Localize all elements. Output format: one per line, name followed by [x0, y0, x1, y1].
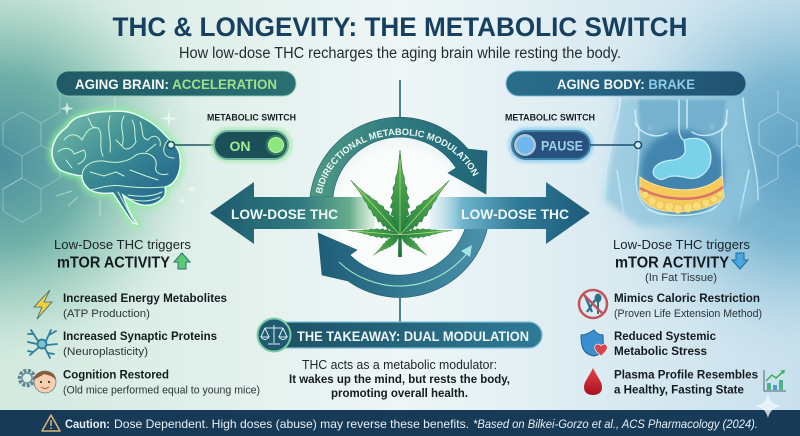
- icon: glowing brain: [52, 97, 200, 224]
- icon: warning triangle: [42, 415, 60, 431]
- arrow: top arc: [310, 117, 487, 197]
- takeaway text: THC acts as a metabolic modulator:: [302, 358, 497, 372]
- item: plasma: a Healthy, Fasting State: [614, 384, 744, 396]
- icon: corner sparkle: [755, 393, 781, 418]
- icon: gear and face: [20, 370, 56, 393]
- takeaway text: [289, 358, 510, 400]
- item: stress: Metabolic Stress: [614, 346, 707, 358]
- icon: shield with heart: [581, 330, 607, 356]
- switch: on: METABOLIC SWITCH: [207, 112, 296, 124]
- right benefits list: [579, 290, 786, 396]
- left mTOR statement: [54, 238, 191, 272]
- icon: balance scale: [258, 318, 290, 352]
- arc label: BIDIRECTIONAL METABOLIC MODULATION: [316, 128, 479, 194]
- right mTOR statement: [613, 238, 750, 284]
- takeaway heading: [258, 318, 542, 352]
- item: caloric: (Proven Life Extension Method): [614, 308, 762, 320]
- center vertical line: [399, 80, 401, 322]
- left mTOR statement: mTOR ACTIVITY: [57, 254, 170, 272]
- left benefits list: [20, 290, 260, 396]
- item: stress: Reduced Systemic: [614, 331, 717, 343]
- footer caution bar: [0, 410, 800, 436]
- title: THC & LONGEVITY: THE METABOLIC SWITCH: [112, 12, 688, 42]
- left mTOR statement: Low-Dose THC triggers: [54, 238, 191, 252]
- takeaway text: promoting overall health.: [331, 386, 468, 400]
- icon: rising chart: [764, 370, 786, 391]
- icon: lightning bolt: [34, 290, 52, 319]
- arrow: low-dose THC left: LOW-DOSE THC: [231, 206, 338, 222]
- panel: aging body heading: [506, 71, 746, 96]
- item: cognition: (Old mice performed equal to young mice): [63, 384, 260, 396]
- item: energy: (ATP Production): [63, 308, 150, 320]
- panel: aging body heading: AGING BODY: BRAKE: [557, 76, 695, 92]
- arrow: low-dose THC right: LOW-DOSE THC: [461, 206, 569, 222]
- panel: aging brain heading: [56, 71, 296, 96]
- subtitle: How low-dose THC recharges the aging brain while resting the body.: [179, 45, 621, 62]
- takeaway text: It wakes up the mind, but rests the body,: [289, 372, 510, 386]
- takeaway heading: THE TAKEAWAY: DUAL MODULATION: [297, 328, 529, 344]
- caution text: Caution:: [65, 417, 110, 431]
- icon: cannabis leaf: [345, 150, 455, 259]
- switch: on: ON: [230, 138, 250, 154]
- panel: aging brain heading: AGING BRAIN: ACCELERATION: [75, 76, 277, 92]
- icon: neuron: [28, 330, 57, 358]
- item: energy: Increased Energy Metabolites: [63, 293, 227, 305]
- item: synaptic: (Neuroplasticity): [63, 346, 148, 358]
- item: plasma: Plasma Profile Resembles: [614, 370, 758, 382]
- right mTOR statement: Low-Dose THC triggers: [613, 238, 750, 252]
- switch: pause: PAUSE: [541, 138, 583, 154]
- icon: blood drop: [584, 368, 602, 395]
- arrow: low-dose THC right: [430, 182, 590, 244]
- right mTOR statement: (In Fat Tissue): [645, 272, 717, 284]
- item: caloric: Mimics Caloric Restriction: [614, 293, 760, 305]
- icon: no eating: [579, 290, 607, 318]
- item: cognition: Cognition Restored: [63, 370, 169, 382]
- item: synaptic: Increased Synaptic Proteins: [63, 331, 217, 343]
- right mTOR statement: mTOR ACTIVITY: [615, 254, 729, 272]
- arrow: low-dose THC left: [210, 182, 375, 244]
- caution text: Dose Dependent. High doses (abuse) may reverse these benefits.: [114, 417, 469, 431]
- icon: torso with stomach and fat: [604, 97, 758, 226]
- arrow: bottom arc: [318, 226, 488, 297]
- caution text: *Based on Bilkei-Gorzo et al., ACS Pharmacology (2024).: [473, 417, 758, 431]
- switch: pause: METABOLIC SWITCH: [505, 112, 595, 124]
- switch: on: [168, 112, 296, 163]
- switch: pause: [505, 112, 642, 163]
